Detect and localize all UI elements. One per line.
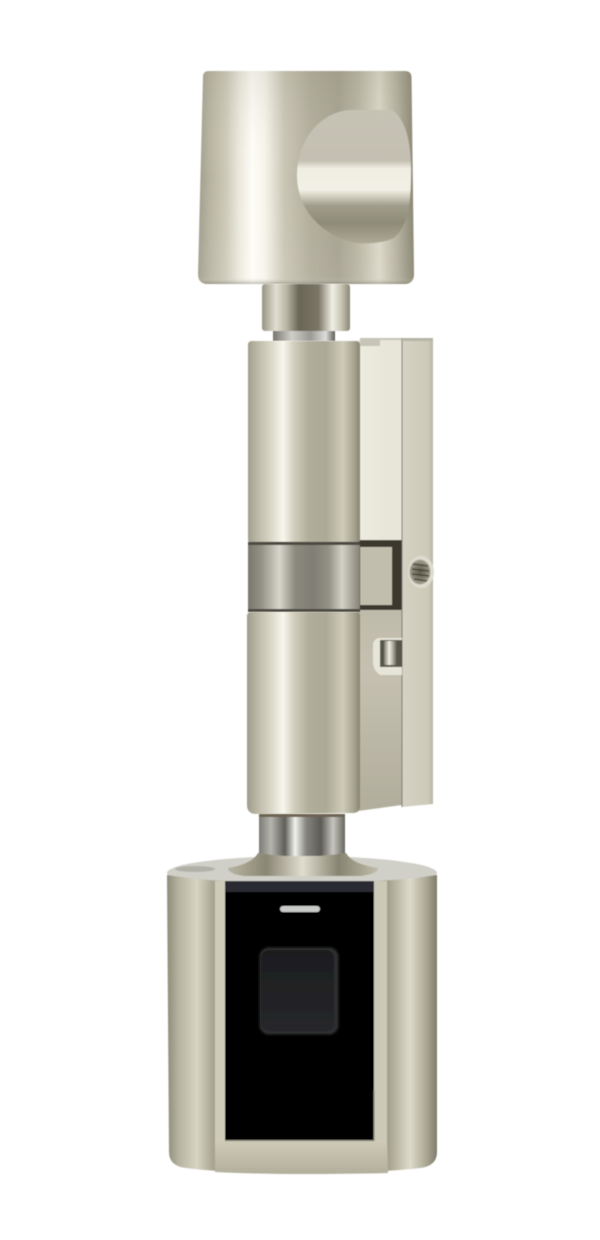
icon: latch slot: [373, 638, 402, 675]
upper neck: [262, 284, 350, 341]
fingerprint sensor: [258, 946, 340, 1036]
black display panel: [225, 881, 374, 1140]
module top face: [167, 856, 437, 890]
icon: thumb-turn knob: [198, 71, 414, 284]
upper profile block: [358, 340, 404, 542]
cylinder centre band: [248, 542, 360, 612]
upper cylinder body: [248, 341, 360, 543]
right rail: [402, 338, 433, 807]
lock cylinder profile: [358, 338, 434, 811]
module body: [167, 875, 437, 1173]
fingerprint module: [167, 814, 437, 1174]
icon: screw hole: [408, 556, 434, 588]
notch with block: [358, 540, 402, 612]
lower cylinder body: [247, 612, 360, 814]
collar cone: [228, 853, 378, 876]
lower neck: [259, 814, 345, 856]
lower profile block: [358, 610, 402, 811]
status LED: [280, 906, 320, 912]
